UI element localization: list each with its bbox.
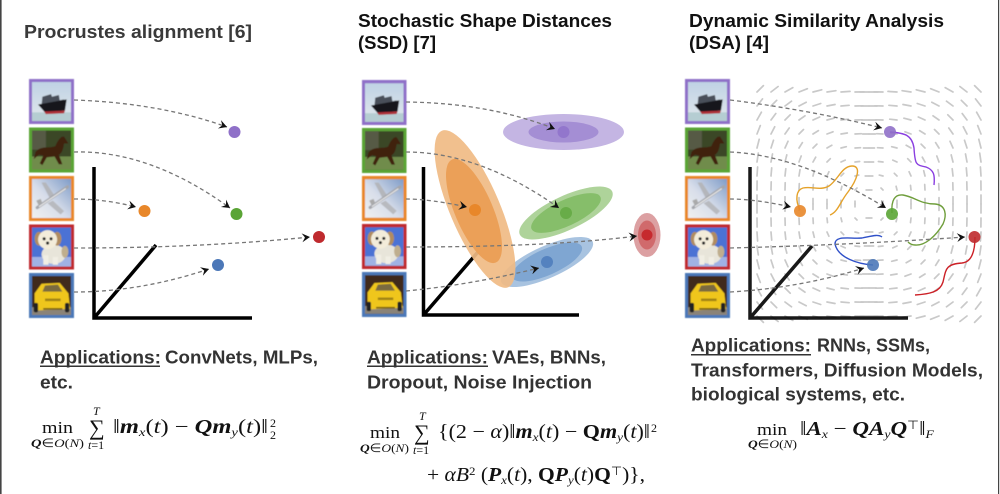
applications text (40, 348, 318, 392)
formula: Procrustes objective: ( (238, 416, 247, 438)
formula: DSA objective: ‖A (800, 418, 820, 440)
formula: SSD objective: t) − Qm (546, 421, 616, 443)
formula: SSD objective: P (487, 464, 502, 486)
image thumbnails column (685, 79, 730, 318)
formula: SSD objective: 2 (469, 464, 475, 478)
formula: SSD objective: T (419, 409, 427, 423)
applications text (367, 348, 606, 392)
heading: Dynamic Similarity Analysis: Dynamic Similarity Analysis (689, 11, 944, 31)
formula: SSD objective: t)‖ (630, 421, 649, 443)
formula: Procrustes objective: x (138, 425, 146, 439)
coordinate axes (750, 167, 908, 318)
formula: SSD objective: ∑ (414, 420, 430, 445)
heading: Procrustes alignment: Procrustes alignment [6] (24, 22, 252, 42)
dashed mapping arrows (730, 100, 965, 292)
heading: Stochastic Shape Distances: Stochastic Shape Distances (358, 11, 612, 31)
formula: Procrustes objective: ( (145, 416, 154, 438)
applications text: Dropout, Noise Injection (367, 372, 592, 392)
uncertainty ellipses (419, 114, 660, 297)
formula: DSA objective: Q∈O(N) (748, 437, 797, 451)
formula: DSA objective: − (828, 418, 852, 440)
applications text: RNNs, SSMs, (817, 336, 930, 356)
applications text (691, 336, 983, 404)
image thumbnails column (29, 79, 74, 318)
applications text: biological systems, etc. (691, 384, 905, 404)
panel: Procrustes alignment (24, 22, 325, 452)
formula: SSD objective: x (532, 430, 539, 444)
applications text: etc. (40, 372, 73, 392)
formula: SSD objective: ( (574, 464, 581, 486)
formula: SSD objective: y (567, 473, 574, 487)
dashed mapping arrows (74, 100, 310, 292)
formula: DSA objective: y (883, 427, 891, 441)
applications text: Applications: (367, 348, 488, 368)
coordinate axes (94, 167, 252, 318)
formula: SSD objective: y (616, 430, 624, 444)
formula: SSD objective: Q∈O(N) (360, 441, 409, 455)
applications text: Applications: (691, 336, 811, 356)
coordinate axes (424, 167, 579, 315)
formula: Procrustes objective: 2 (270, 428, 276, 442)
formula: DSA objective: x (821, 427, 829, 441)
formula: Procrustes objective: ∑ (89, 415, 105, 440)
formula: DSA objective: ‖ (919, 418, 926, 440)
formula: Procrustes objective: T (93, 404, 101, 418)
formula: SSD objective: ( (623, 421, 631, 443)
formula: SSD objective: t), QP (514, 464, 567, 486)
panel: Dynamic Similarity Analysis (685, 11, 983, 451)
formula: SSD objective: t)Q (581, 464, 610, 486)
applications text: Applications: (40, 348, 161, 368)
dashed mapping arrows (406, 102, 637, 291)
formula: DSA objective: ⊤ (907, 418, 919, 432)
formula: DSA objective: QA (852, 418, 884, 440)
panel: Stochastic Shape Distances (358, 11, 660, 487)
formula: DSA objective: min (757, 420, 788, 439)
embedding points (138, 126, 325, 271)
heading line 2: SSD: (SSD) [7] (358, 33, 436, 53)
formula: SSD objective: ( (539, 421, 546, 443)
image thumbnails column (362, 80, 406, 317)
formula: SSD objective: min (370, 423, 401, 442)
formula: SSD objective (360, 409, 657, 487)
rotational vector field (757, 86, 981, 322)
formula: SSD objective: 2 (651, 421, 657, 435)
formula: Procrustes objective (31, 404, 276, 452)
formula: Procrustes objective: 2 (270, 416, 276, 430)
formula: SSD objective: ( (475, 464, 488, 486)
formula: Procrustes objective: t)‖ (246, 416, 265, 438)
formula: SSD objective: ( (507, 464, 514, 486)
applications text: Transformers, Diffusion Models, (691, 360, 983, 380)
formula: SSD objective: t=1 (413, 443, 429, 457)
formula: Procrustes objective: min (42, 418, 74, 437)
formula: SSD objective: {(2 − α)‖m (438, 421, 531, 443)
applications text: VAEs, BNNs, (492, 348, 606, 368)
formula: Procrustes objective: y (230, 425, 239, 439)
formula: Procrustes objective: ‖m (113, 416, 135, 438)
formula: DSA objective (748, 418, 935, 451)
formula: SSD objective: x (500, 473, 508, 487)
formula: DSA objective: Q (890, 418, 907, 440)
formula: SSD objective: ⊤ (611, 464, 622, 478)
formula: SSD objective: + αB (427, 464, 467, 486)
dynamical trajectories (797, 132, 975, 295)
formula: Procrustes objective: t) − Qm (154, 416, 225, 438)
formula: SSD objective: )}, (622, 464, 645, 486)
heading line 2: DSA: (DSA) [4] (689, 33, 769, 53)
embedding points (794, 126, 980, 271)
formula: Procrustes objective: t=1 (88, 438, 104, 452)
formula: Procrustes objective: Q∈O(N) (31, 436, 84, 450)
applications text: ConvNets, MLPs, (165, 348, 318, 368)
formula: DSA objective: F (924, 427, 935, 441)
